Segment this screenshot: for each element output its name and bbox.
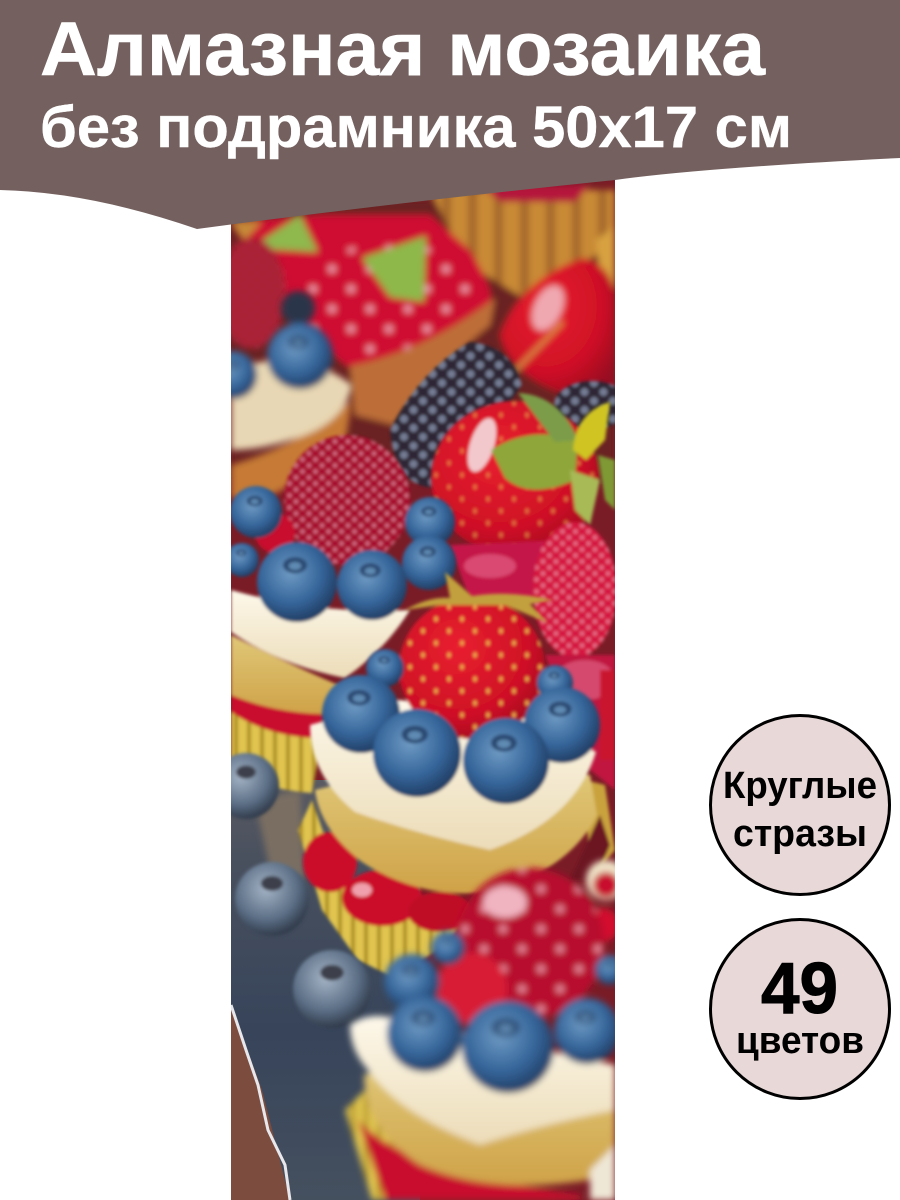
badge: 49 colours: 49 [761, 949, 838, 1029]
dish surface [231, 780, 420, 1200]
badge: round rhinestones [710, 716, 890, 894]
middle left cupcake [225, 435, 456, 793]
header banner [0, 0, 900, 229]
loose blueberries on dish [231, 750, 369, 1028]
subtitle: без подрамника 50х17 см [40, 95, 792, 160]
cream swirl [310, 700, 596, 850]
raspberry on cupcake [284, 435, 410, 565]
raspberry top left [218, 238, 286, 348]
right edge cupcake fragment [585, 860, 626, 942]
pink glaze and right raspberries [450, 522, 617, 790]
red glazed tart [231, 215, 495, 425]
blackberries [390, 342, 630, 488]
golden tart top right [430, 185, 615, 296]
title: Алмазная мозаика [40, 7, 766, 92]
bottom cupcake [345, 860, 626, 1200]
red raspberry on top [437, 868, 604, 1023]
red jelly [303, 832, 472, 932]
badge: round rhinestones: стразы [733, 813, 867, 855]
strawberry with green leaves [431, 393, 615, 555]
yellow paper cup [298, 800, 470, 978]
badge: 49 colours: цветов [736, 1020, 864, 1062]
photo: berry cupcakes diamond mosaic [209, 180, 630, 1200]
upper left cupcake [209, 291, 352, 500]
main strawberry [399, 572, 553, 739]
strawberry upper right [500, 258, 615, 395]
badge: 49 colours [710, 920, 890, 1098]
central cupcake with strawberry [298, 572, 615, 978]
sponge cake [315, 770, 597, 893]
badge: round rhinestones: Круглые [723, 765, 877, 807]
top tarts and berries [218, 185, 615, 480]
